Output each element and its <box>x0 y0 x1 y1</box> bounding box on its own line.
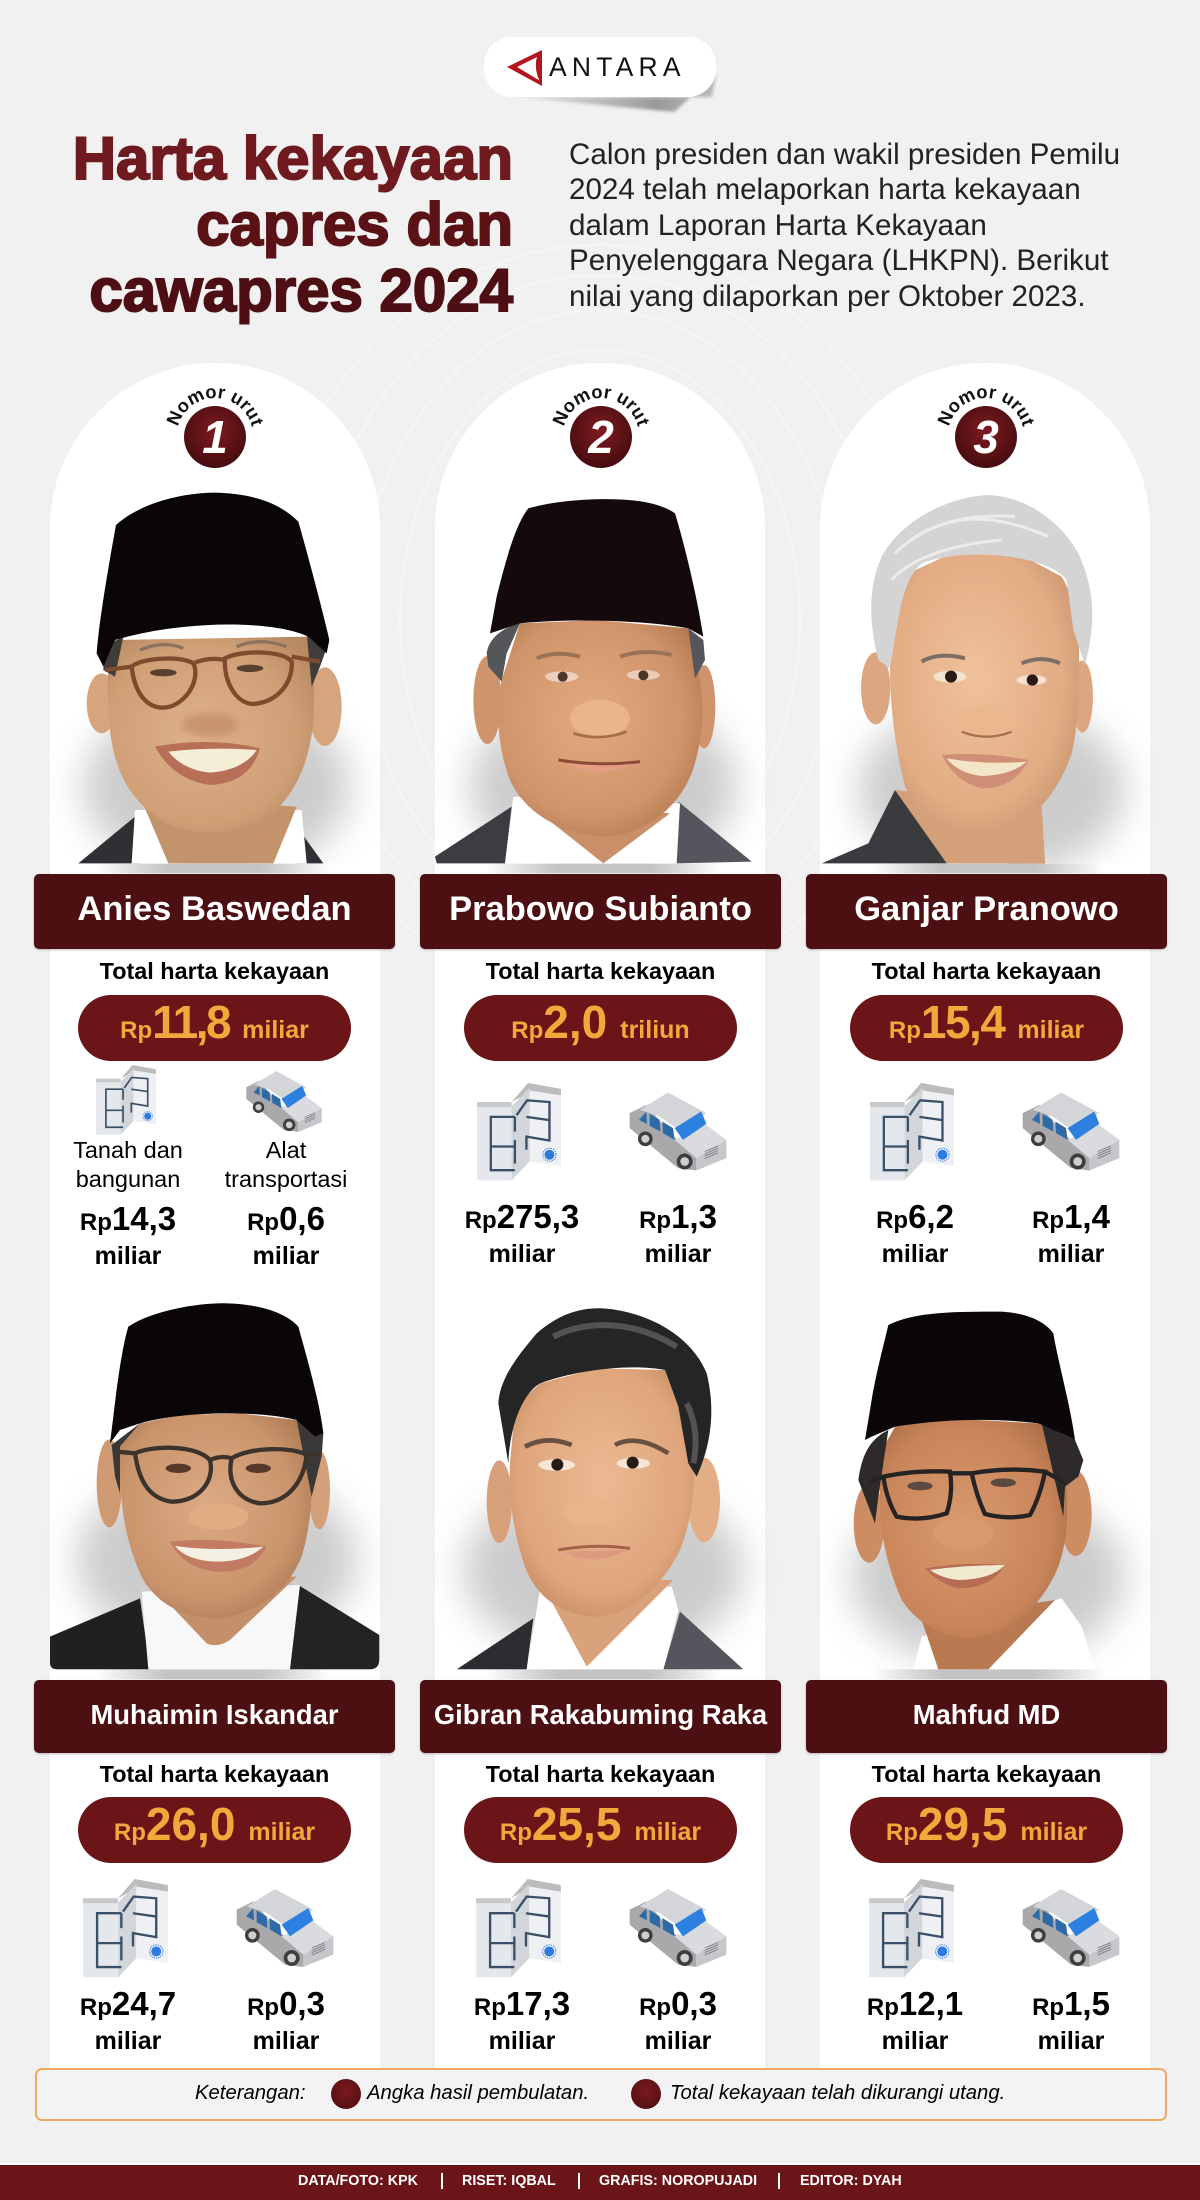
footer: graphics: GRAFIS: NOROPUJADI <box>599 2173 757 2189</box>
value: transport <box>247 1985 325 2055</box>
value: transport: Rp1,5 <box>1032 1985 1110 2022</box>
value: land and building: miliar <box>882 2027 948 2055</box>
value: transport: miliar <box>253 1242 319 1270</box>
pill: total value: Rp15,4 miliar <box>889 996 1084 1048</box>
pill: total value <box>464 1797 737 1863</box>
legend: note 2: Total kekayaan telah dikurangi utang. <box>670 2082 1005 2104</box>
name bar <box>420 874 781 949</box>
title: Harta kekayaan <box>73 125 513 192</box>
value: transport <box>247 1200 325 1270</box>
value: land and building <box>80 1200 176 1270</box>
value: land and building: miliar <box>95 2027 161 2055</box>
pill: total value <box>78 1797 351 1863</box>
badge: nomor urut 1: Nomor urut <box>166 388 263 427</box>
badge: nomor urut 3 <box>937 388 1034 468</box>
value: land and building: miliar <box>489 2027 555 2055</box>
footer: data: DATA/FOTO: KPK <box>298 2173 418 2189</box>
portrait: Muhaimin <box>50 1303 380 1680</box>
badge: nomor urut 3: 3 <box>973 411 999 463</box>
value: transport <box>639 1985 717 2055</box>
value: transport <box>1032 1985 1110 2055</box>
card: Gibran Rakabuming Raka <box>419 1308 782 2055</box>
icon: land and building <box>477 1082 561 1180</box>
value: transport: Rp1,3 <box>639 1198 717 1235</box>
footer bar <box>0 2163 1200 2200</box>
intro paragraph: dalam Laporan Harta Kekayaan <box>569 209 987 242</box>
badge: nomor urut 2: Nomor urut <box>552 388 649 427</box>
intro paragraph: Penyelenggara Negara (LHKPN). Berikut <box>569 244 1109 277</box>
value: transport: miliar <box>1038 2027 1104 2055</box>
value: land and building: miliar <box>95 1242 161 1270</box>
pill: total value <box>850 995 1123 1061</box>
label: transport <box>225 1137 347 1192</box>
portrait: Mahfud <box>836 1312 1140 1680</box>
logo: ANTARA <box>484 37 717 114</box>
footer: editor: EDITOR: DYAH <box>800 2173 902 2189</box>
legend: marker 2 <box>631 2079 661 2109</box>
portrait: Prabowo <box>435 499 752 874</box>
icon: car <box>1022 1092 1120 1170</box>
value: land and building <box>876 1198 954 1268</box>
intro paragraph: 2024 telah melaporkan harta kekayaan <box>569 173 1081 206</box>
icon: land and building <box>83 1879 168 1978</box>
portrait: Anies <box>68 492 366 874</box>
legend box <box>35 2068 1167 2121</box>
label: total: Total harta kekayaan <box>100 1761 329 1787</box>
legend: label: Keterangan: <box>195 2082 306 2104</box>
value: transport: miliar <box>1038 1240 1104 1268</box>
panel: column 3 <box>820 363 1150 2068</box>
pill: total value: Rp2,0 triliun <box>511 996 690 1048</box>
icon: land and building <box>476 1879 561 1978</box>
value: land and building: Rp24,7 <box>80 1985 176 2022</box>
label: total: Total harta kekayaan <box>100 958 329 984</box>
card: Anies Baswedan <box>33 492 396 1270</box>
label: land and building: bangunan <box>76 1166 180 1192</box>
intro paragraph: Calon presiden dan wakil presiden Pemilu <box>569 138 1120 171</box>
value: land and building: Rp6,2 <box>876 1198 954 1235</box>
value: transport: Rp0,3 <box>247 1985 325 2022</box>
badge: nomor urut 2 <box>552 388 649 468</box>
label: total: Total harta kekayaan <box>486 958 715 984</box>
footer: research: RISET: IQBAL <box>462 2173 556 2189</box>
card: Ganjar Pranowo <box>805 495 1168 1268</box>
name bar: Prabowo Subianto <box>449 890 752 928</box>
name bar: Muhaimin Iskandar <box>90 1699 339 1730</box>
value: land and building: Rp17,3 <box>474 1985 570 2022</box>
label: land and building: Tanah dan <box>73 1137 183 1163</box>
value: land and building: miliar <box>882 1240 948 1268</box>
pill: total value <box>850 1797 1123 1863</box>
badge: nomor urut 1: 1 <box>202 411 228 463</box>
intro paragraph: nilai yang dilaporkan per Oktober 2023. <box>569 280 1086 313</box>
icon: car <box>630 1889 726 1967</box>
panel: column 1 <box>50 363 380 2068</box>
badge: nomor urut 2: 2 <box>587 411 614 463</box>
icon: land and building <box>96 1065 156 1134</box>
icon: land and building <box>870 1082 954 1180</box>
name bar: Gibran Rakabuming Raka <box>434 1699 767 1730</box>
title: capres dan <box>196 191 513 258</box>
value: transport: miliar <box>253 2027 319 2055</box>
name bar <box>34 874 395 949</box>
value: land and building: miliar <box>489 1240 555 1268</box>
name bar: Anies Baswedan <box>77 890 352 928</box>
icon: car <box>246 1071 322 1132</box>
icon: car <box>1022 1889 1120 1967</box>
label: total: Total harta kekayaan <box>486 1761 715 1787</box>
name bar <box>806 1680 1167 1753</box>
icon: car <box>630 1092 726 1170</box>
label: transport: Alat <box>266 1137 306 1163</box>
value: land and building <box>474 1985 570 2055</box>
value: land and building: Rp275,3 <box>465 1198 579 1235</box>
portrait: Gibran <box>448 1308 758 1680</box>
value: transport: Rp0,6 <box>247 1200 325 1237</box>
pill: total value: Rp29,5 miliar <box>886 1798 1087 1850</box>
name bar: Ganjar Pranowo <box>854 890 1119 928</box>
pill: total value <box>78 995 351 1061</box>
value: transport <box>639 1198 717 1268</box>
pill: total value <box>464 995 737 1061</box>
value: transport: Rp0,3 <box>639 1985 717 2022</box>
value: transport: miliar <box>645 1240 711 1268</box>
value: land and building <box>465 1198 579 1268</box>
logo: ANTARA: ANTARA <box>549 52 686 82</box>
pill: total value: Rp11,8 miliar <box>120 996 309 1048</box>
pill: total value: Rp26,0 miliar <box>114 1798 315 1850</box>
value: land and building: Rp14,3 <box>80 1200 176 1237</box>
portrait: Ganjar <box>822 495 1140 874</box>
panel: column 2 <box>435 363 765 2068</box>
name bar <box>34 1680 395 1753</box>
icon: land and building <box>869 1879 954 1978</box>
value: transport: Rp1,4 <box>1032 1198 1110 1235</box>
label: total: Total harta kekayaan <box>872 1761 1101 1787</box>
legend: marker 1 <box>331 2079 361 2109</box>
value: land and building: Rp12,1 <box>867 1985 963 2022</box>
pill: total value: Rp25,5 miliar <box>500 1798 701 1850</box>
label: total: Total harta kekayaan <box>872 958 1101 984</box>
title: cawapres 2024 <box>89 257 513 324</box>
icon: car <box>236 1889 334 1967</box>
name bar <box>420 1680 781 1753</box>
badge: nomor urut 1 <box>166 388 263 468</box>
intro paragraph <box>569 138 1120 313</box>
name bar <box>806 874 1167 949</box>
card: Muhaimin Iskandar <box>33 1303 396 2055</box>
value: land and building <box>80 1985 176 2055</box>
label: transport: transportasi <box>225 1166 347 1192</box>
value: transport <box>1032 1198 1110 1268</box>
title <box>73 125 514 324</box>
value: transport: miliar <box>645 2027 711 2055</box>
label: land and building <box>73 1137 183 1192</box>
card: Prabowo Subianto <box>419 499 782 1268</box>
legend: note 1: Angka hasil pembulatan. <box>367 2082 589 2104</box>
badge: nomor urut 3: Nomor urut <box>937 388 1034 427</box>
name bar: Mahfud MD <box>913 1699 1060 1730</box>
value: land and building <box>867 1985 963 2055</box>
card: Mahfud MD <box>805 1312 1168 2055</box>
